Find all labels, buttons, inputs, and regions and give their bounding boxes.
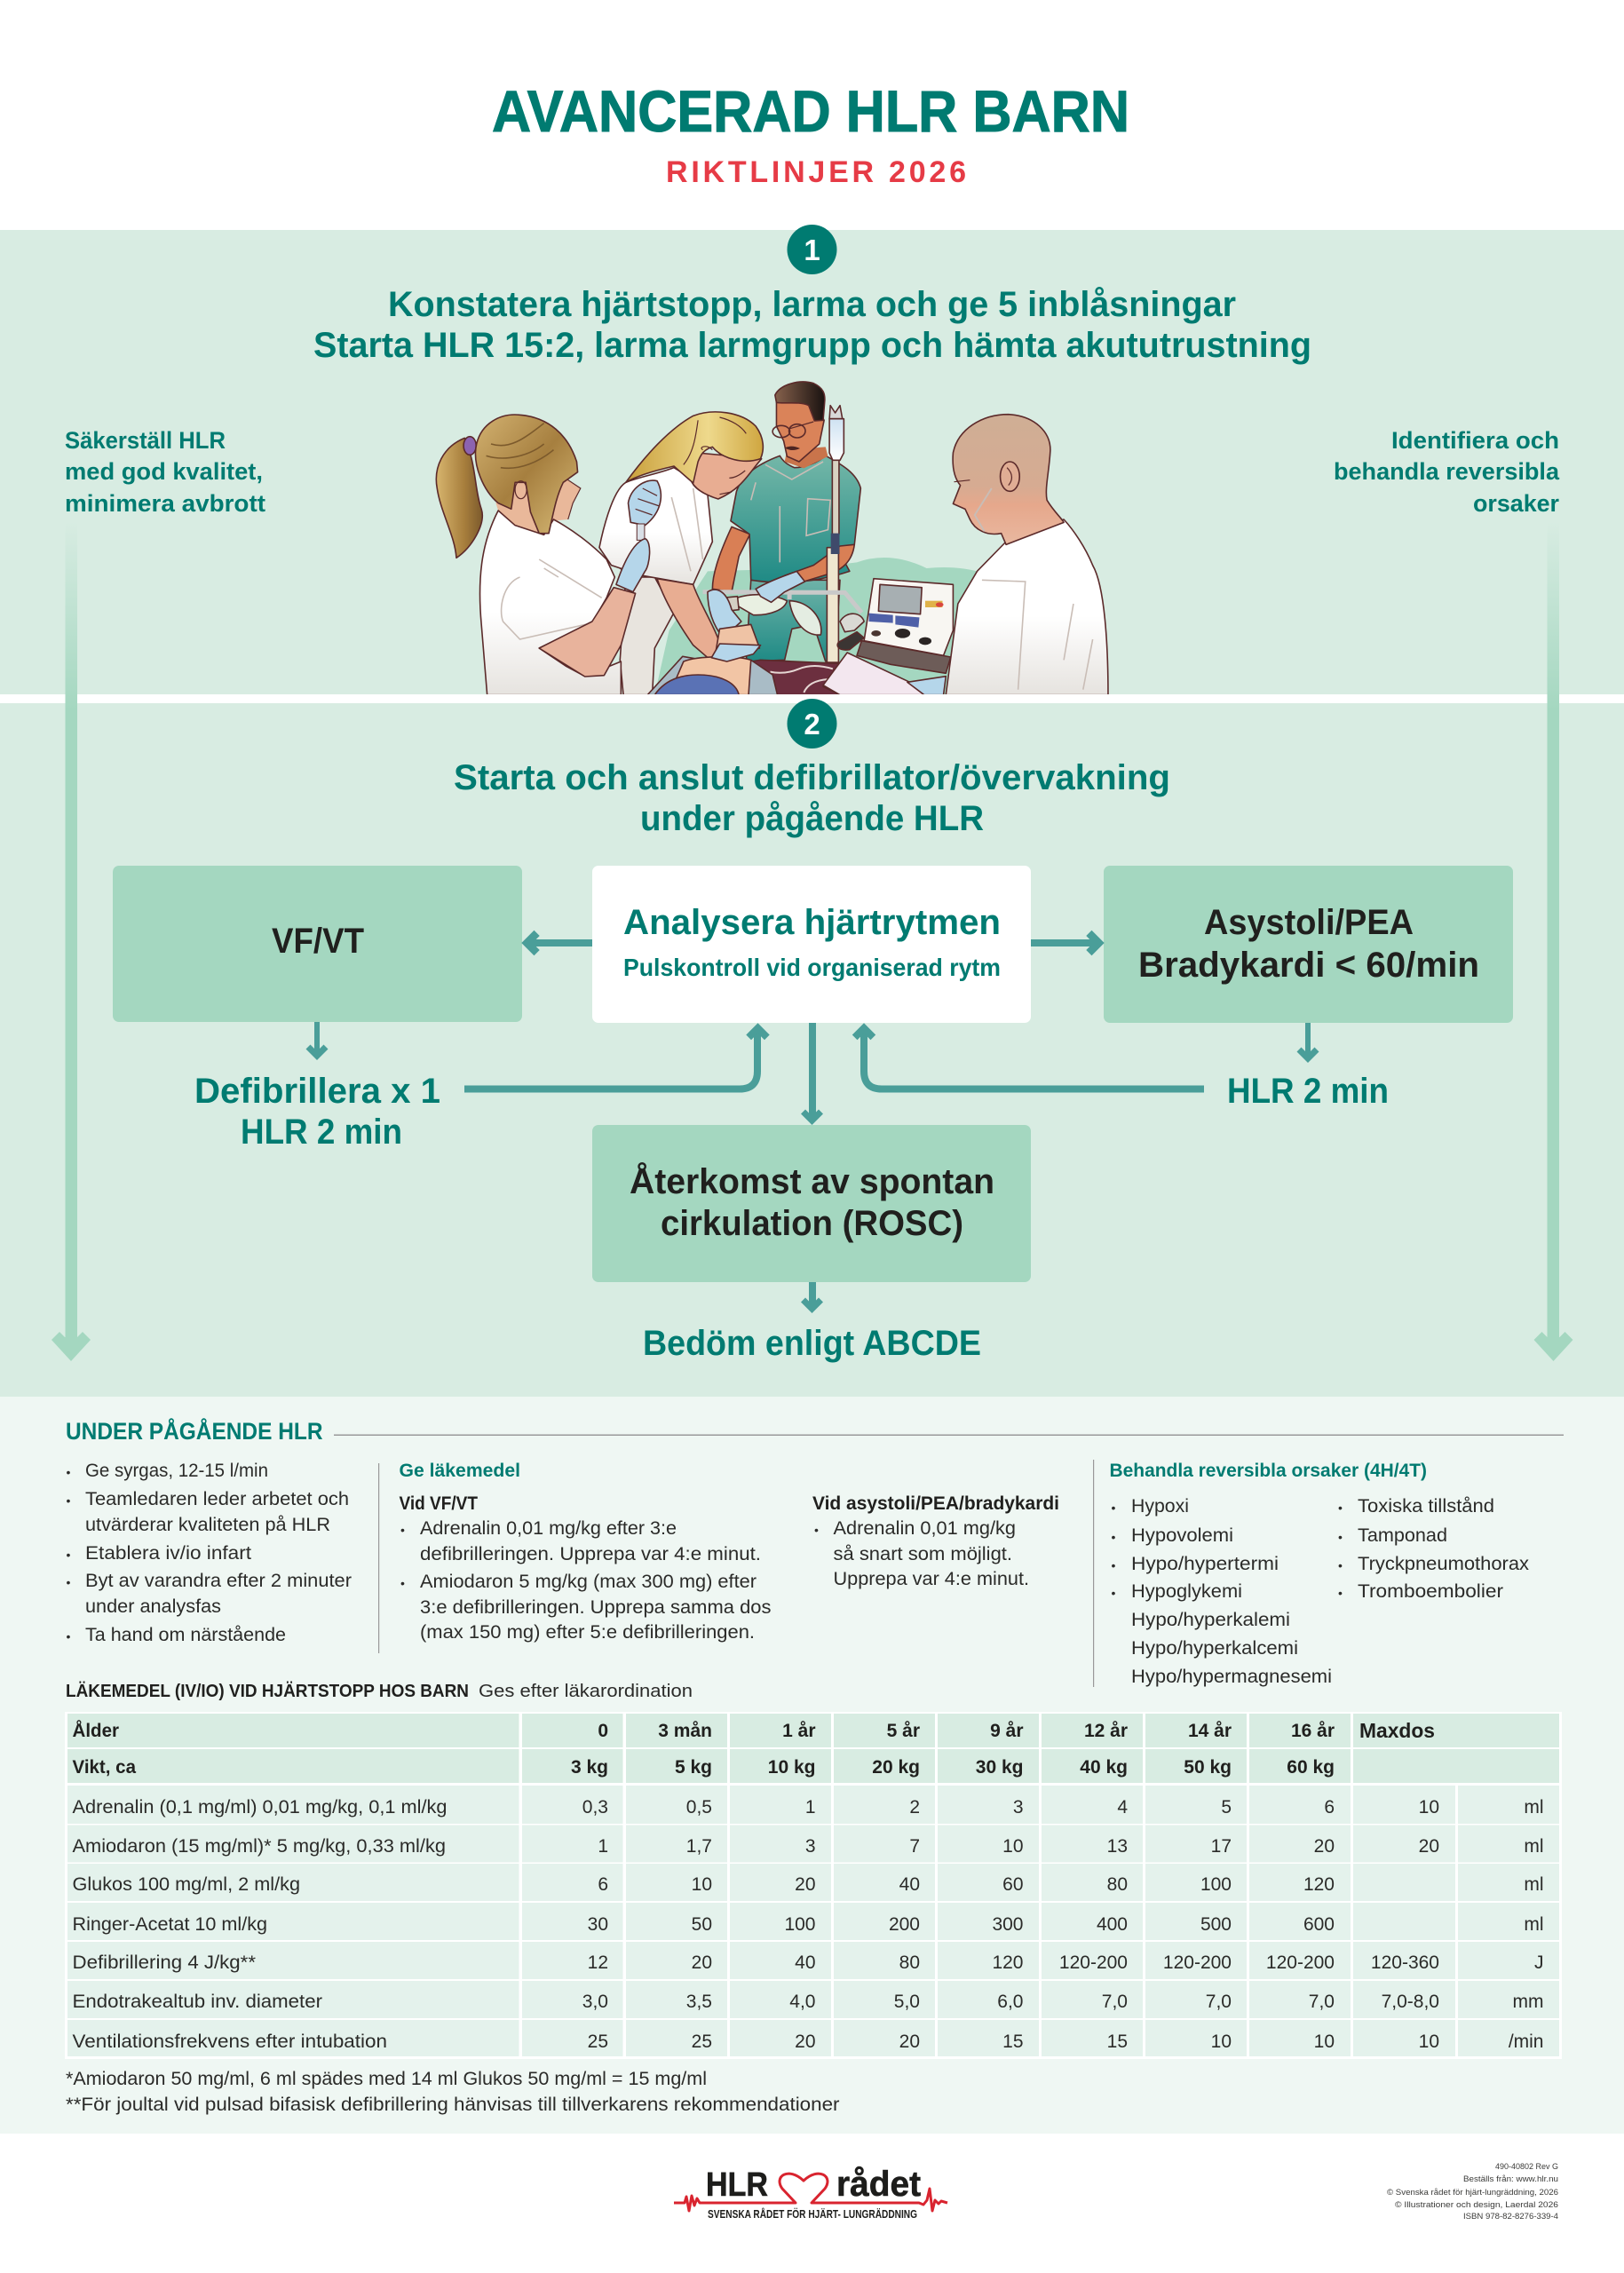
table row: ringer acetate: 100 xyxy=(784,1914,815,1935)
table row: adrenaline: 5 xyxy=(1221,1797,1232,1818)
text: ensure quality CPR: Säkerställ HLR xyxy=(65,427,226,454)
block: reversible causes: Hypo/hyperkalemi xyxy=(1131,1610,1290,1630)
imprint: Beställs från: www.hlr.nu xyxy=(1463,2174,1558,2184)
table row: glucose: 10 xyxy=(692,1874,712,1895)
box: analyse rhythm: Analysera hjärtrytmen xyxy=(623,903,1001,942)
table row: adrenaline: 10 xyxy=(1419,1797,1439,1818)
block: reversible causes xyxy=(1110,1461,1530,1687)
step 2 badge: 2 xyxy=(804,708,820,741)
block: reversible causes: Tamponad xyxy=(1358,1525,1447,1546)
text: identify reversible causes: orsaker xyxy=(1473,490,1559,517)
table row: endotracheal tube: 7,0 xyxy=(1309,1992,1335,2012)
block: reversible causes: Hypoglykemi xyxy=(1131,1581,1242,1602)
table row: weight: 5 kg xyxy=(675,1757,712,1778)
block: reversible causes: • xyxy=(1112,1530,1115,1544)
step 1 heading xyxy=(313,285,1311,365)
arrow: to ROSC xyxy=(801,1023,823,1125)
block: medication asystole: Adrenalin 0,01 mg/kg xyxy=(833,1518,1016,1539)
subtitle: RIKTLINJER 2026 xyxy=(666,155,966,189)
table row: endotracheal tube: 7,0 xyxy=(1206,1992,1232,2012)
table row: glucose: 100 xyxy=(1200,1874,1232,1895)
block: reversible causes: • xyxy=(1338,1586,1343,1600)
block: medication asystole: så snart som möjligt. xyxy=(833,1544,1012,1564)
imprint: 490-40802 Rev G xyxy=(1495,2162,1558,2172)
table row: adrenaline: 1 xyxy=(805,1797,815,1818)
table row: amiodarone: 20 xyxy=(1314,1836,1335,1857)
table row: age: Ålder xyxy=(73,1720,119,1741)
table row: endotracheal tube: 5,0 xyxy=(894,1992,920,2012)
bed rail and ventilation bag xyxy=(703,571,861,635)
white separator band xyxy=(0,694,1624,703)
table row: ringer acetate: Ringer-Acetat 10 ml/kg xyxy=(73,1914,267,1935)
table row: ringer acetate: 50 xyxy=(692,1914,712,1935)
table row: ventilation rate: 20 xyxy=(795,2031,815,2052)
table row: weight: 40 kg xyxy=(1080,1757,1128,1778)
table row: weight: 30 kg xyxy=(976,1757,1023,1778)
table row: endotracheal tube: 6,0 xyxy=(997,1992,1023,2012)
text: defibrillate: Defibrillera x 1 xyxy=(194,1072,440,1111)
table row: age: 0 xyxy=(598,1721,608,1741)
table row: defibrillation: 20 xyxy=(692,1952,712,1973)
table row: weight xyxy=(73,1757,1335,1778)
text: defibrillate xyxy=(194,1072,440,1152)
table row: defibrillation xyxy=(73,1952,1543,1973)
table row: defibrillation: Defibrillering 4 J/kg** xyxy=(73,1952,256,1973)
table row: ventilation rate: 25 xyxy=(588,2031,608,2052)
table row: glucose: 80 xyxy=(1107,1874,1128,1895)
list: general actions: under analysfas xyxy=(85,1596,221,1617)
arrow: to asystole xyxy=(1031,931,1104,955)
step 2 badge xyxy=(787,699,836,748)
list: general actions: Etablera iv/io infart xyxy=(85,1543,251,1564)
block: medication asystole xyxy=(812,1493,1059,1589)
table row: endotracheal tube: 4,0 xyxy=(789,1992,815,2012)
table row: ventilation rate: 10 xyxy=(1211,2031,1232,2052)
table row: weight: 20 kg xyxy=(872,1757,920,1778)
table row: age: 5 år xyxy=(887,1721,920,1741)
block: give medication VF/VT: Vid VF/VT xyxy=(400,1493,478,1514)
table row: adrenaline: 2 xyxy=(909,1797,920,1818)
table row: age: 9 år xyxy=(990,1721,1023,1741)
block: reversible causes: Hypo/hyperkalcemi xyxy=(1131,1638,1298,1659)
arrow: defibrillate return xyxy=(464,1024,769,1089)
table heading: Ges efter läkarordination xyxy=(479,1682,693,1701)
table row: amiodarone: 10 xyxy=(1002,1836,1023,1857)
table row: weight: 60 kg xyxy=(1287,1757,1335,1778)
table row: age: 16 år xyxy=(1291,1721,1335,1741)
arrow: asystole down xyxy=(1296,1023,1319,1063)
table row: weight: 50 kg xyxy=(1184,1757,1232,1778)
iv stand xyxy=(827,406,844,662)
table row: defibrillation: 120-200 xyxy=(1059,1952,1128,1973)
table row: ringer acetate: ml xyxy=(1524,1914,1543,1935)
footnotes: *Amiodaron 50 mg/ml, 6 ml spädes med 14 ml Glukos 50 mg/ml = 15 mg/ml xyxy=(66,2069,707,2089)
doctor in green scrubs xyxy=(712,382,860,661)
table row: age: 14 år xyxy=(1188,1721,1232,1741)
block: reversible causes: Hypo/hypertermi xyxy=(1131,1554,1279,1574)
block: reversible causes: Hypovolemi xyxy=(1131,1525,1233,1546)
table row: amiodarone: 13 xyxy=(1107,1836,1128,1857)
text: ensure quality CPR: med god kvalitet, xyxy=(65,458,263,485)
table row: glucose xyxy=(73,1874,1543,1895)
block: give medication VF/VT: (max 150 mg) efter 5:e defibrilleringen. xyxy=(420,1622,755,1643)
nurse with blond hair xyxy=(599,412,763,695)
list: general actions: • xyxy=(66,1575,71,1589)
step 2 heading: under pågående HLR xyxy=(640,799,984,838)
table row: glucose: 60 xyxy=(1002,1874,1023,1895)
list: general actions: • xyxy=(66,1548,71,1562)
table row: defibrillation: 40 xyxy=(795,1952,815,1973)
list: general actions: • xyxy=(66,1629,71,1643)
arrow: CPR return xyxy=(852,1024,1204,1089)
table row: endotracheal tube: mm xyxy=(1513,1992,1543,2012)
table row: endotracheal tube: 3,5 xyxy=(686,1992,712,2012)
table row: weight: 10 kg xyxy=(768,1757,815,1778)
table row: weight: 3 kg xyxy=(571,1757,608,1778)
table row: adrenaline: 6 xyxy=(1324,1797,1335,1818)
table row: ventilation rate: 15 xyxy=(1002,2031,1023,2052)
block: medication asystole: • xyxy=(814,1523,819,1537)
block: reversible causes: • xyxy=(1338,1530,1343,1544)
table row: endotracheal tube: 3,0 xyxy=(582,1992,608,2012)
table row: amiodarone: Amiodaron (15 mg/ml)* 5 mg/kg, 0,33 ml/kg xyxy=(73,1836,446,1857)
table row: defibrillation: 120-200 xyxy=(1163,1952,1232,1973)
table row: ringer acetate: 200 xyxy=(889,1914,920,1935)
text: ensure quality CPR xyxy=(65,427,265,517)
table row: defibrillation: J xyxy=(1534,1952,1543,1973)
box: asystole/PEA: Asystoli/PEA xyxy=(1204,903,1414,942)
background blob xyxy=(654,558,996,695)
bald man xyxy=(946,415,1108,695)
block: give medication VF/VT: Ge läkemedel xyxy=(400,1461,520,1481)
box: ROSC xyxy=(592,1125,1031,1282)
block: give medication VF/VT: 3:e defibrilleringen. Upprepa samma dos xyxy=(420,1597,771,1618)
list: general actions: utvärderar kvaliteten på HLR xyxy=(85,1515,330,1535)
table row: amiodarone xyxy=(73,1836,1543,1857)
block: reversible causes: • xyxy=(1338,1501,1343,1515)
list: general actions: Ta hand om närstående xyxy=(85,1625,286,1645)
table row: age: Maxdos xyxy=(1359,1719,1435,1742)
step 1 badge xyxy=(787,225,836,274)
table row: ventilation rate: 10 xyxy=(1419,2031,1439,2052)
block: give medication VF/VT: Adrenalin 0,01 mg/kg efter 3:e xyxy=(420,1518,677,1539)
table row: ventilation rate: 15 xyxy=(1107,2031,1128,2052)
block: reversible causes: Behandla reversibla orsaker (4H/4T) xyxy=(1110,1461,1427,1481)
table heading: LÄKEMEDEL (IV/IO) VID HJÄRTSTOPP HOS BARN xyxy=(66,1681,469,1701)
block: give medication VF/VT xyxy=(400,1461,771,1643)
step 1 heading: Konstatera hjärtstopp, larma och ge 5 inblåsningar xyxy=(388,285,1236,324)
block: reversible causes: Toxiska tillstånd xyxy=(1358,1496,1494,1517)
text: identify reversible causes xyxy=(1334,427,1560,517)
panel: during CPR background xyxy=(0,1397,1624,2134)
defibrillator xyxy=(837,579,953,673)
text: ensure quality CPR: minimera avbrott xyxy=(65,490,265,517)
list: general actions: Teamledaren leder arbetet och xyxy=(85,1489,349,1509)
box: asystole/PEA: Bradykardi < 60/min xyxy=(1138,946,1479,985)
table row: adrenaline: 0,5 xyxy=(686,1797,712,1818)
block: medication asystole: Vid asystoli/PEA/bradykardi xyxy=(812,1493,1059,1514)
table row: defibrillation: 120-200 xyxy=(1266,1952,1335,1973)
block: reversible causes: • xyxy=(1112,1501,1115,1515)
imprint: ISBN 978-82-8276-339-4 xyxy=(1463,2212,1558,2222)
block: reversible causes: Hypoxi xyxy=(1131,1496,1189,1517)
logo: HLR-rådet: HLR xyxy=(706,2166,768,2204)
text: defibrillate: HLR 2 min xyxy=(241,1113,402,1152)
list: general actions: Ge syrgas, 12-15 l/min xyxy=(85,1461,268,1481)
arrow: VF/VT down xyxy=(305,1022,329,1060)
list: general actions: • xyxy=(66,1493,71,1508)
table row: amiodarone: 1,7 xyxy=(686,1836,712,1857)
table row: defibrillation: 120-360 xyxy=(1371,1952,1439,1973)
table row: adrenaline: 0,3 xyxy=(582,1797,608,1818)
step 1 heading: Starta HLR 15:2, larma larmgrupp och hämta akututrustning xyxy=(313,326,1311,365)
illustration: resuscitation team xyxy=(436,382,1108,695)
paper and hand xyxy=(823,653,946,695)
footnotes: **För joultal vid pulsad bifasisk defibrillering hänvisas till tillverkarens rekommendationer xyxy=(66,2095,840,2115)
text: identify reversible causes: behandla reversibla xyxy=(1334,458,1560,485)
table row: ventilation rate: 20 xyxy=(899,2031,920,2052)
table row: adrenaline: Adrenalin (0,1 mg/ml) 0,01 mg/kg, 0,1 ml/kg xyxy=(73,1797,448,1818)
table row: weight: Vikt, ca xyxy=(73,1757,136,1778)
block: reversible causes: Tromboembolier xyxy=(1358,1581,1503,1602)
table row: glucose: 20 xyxy=(795,1874,815,1895)
table row: glucose: 6 xyxy=(598,1874,608,1895)
table row: defibrillation: 80 xyxy=(899,1952,920,1973)
table heading xyxy=(66,1681,693,1701)
table row: age: 12 år xyxy=(1084,1721,1128,1741)
arrow: to VF/VT xyxy=(522,931,592,955)
heading: during CPR: UNDER PÅGÅENDE HLR xyxy=(66,1417,323,1445)
box: VF/VT: VF/VT xyxy=(272,922,364,961)
box: ROSC: Återkomst av spontan xyxy=(630,1161,994,1201)
step 2 heading xyxy=(454,758,1170,838)
table row: ringer acetate: 600 xyxy=(1303,1914,1335,1935)
patient xyxy=(647,624,840,695)
step 1 badge: 1 xyxy=(804,234,820,266)
table row: amiodarone: 1 xyxy=(598,1836,608,1857)
table row: ventilation rate xyxy=(73,2031,1543,2052)
table row: defibrillation: 12 xyxy=(588,1952,608,1973)
list: general actions: Byt av varandra efter 2 minuter xyxy=(85,1571,352,1591)
block: reversible causes: • xyxy=(1338,1558,1343,1572)
table row: amiodarone: 7 xyxy=(909,1836,920,1857)
logo: HLR-rådet: SVENSKA RÅDET FÖR HJÄRT- LUNGRÄDDNING xyxy=(708,2207,917,2221)
table row: glucose: 40 xyxy=(899,1874,920,1895)
box: analyse rhythm xyxy=(592,866,1031,1023)
panel: step 1 background xyxy=(0,230,1624,694)
box: ROSC: cirkulation (ROSC) xyxy=(661,1204,963,1243)
table row: ventilation rate: Ventilationsfrekvens efter intubation xyxy=(73,2031,387,2052)
block: give medication VF/VT: • xyxy=(400,1523,405,1537)
title: AVANCERAD HLR BARN xyxy=(492,78,1129,144)
text: identify reversible causes: Identifiera och xyxy=(1391,427,1559,454)
box: VF/VT xyxy=(113,866,522,1022)
table row: ventilation rate: 25 xyxy=(692,2031,712,2052)
imprint: © Illustrationer och design, Laerdal 2026 xyxy=(1395,2200,1558,2210)
list: general actions xyxy=(66,1461,352,1645)
imprint xyxy=(1387,2162,1558,2222)
step 2 heading: Starta och anslut defibrillator/övervakning xyxy=(454,758,1170,797)
table row: glucose: ml xyxy=(1524,1874,1543,1895)
block: reversible causes: • xyxy=(1112,1558,1115,1572)
box: analyse rhythm: Pulskontroll vid organiserad rytm xyxy=(623,954,1001,981)
table row: ringer acetate: 500 xyxy=(1200,1914,1232,1935)
table row: age xyxy=(73,1719,1435,1742)
logo: HLR-rådet xyxy=(674,2165,947,2221)
block: reversible causes: Tryckpneumothorax xyxy=(1358,1554,1530,1574)
table row: ringer acetate: 30 xyxy=(588,1914,608,1935)
table row: age: 1 år xyxy=(782,1721,815,1741)
text: CPR 2 min: HLR 2 min xyxy=(1227,1072,1389,1111)
table row: amiodarone: ml xyxy=(1524,1836,1543,1857)
arrow: ROSC down xyxy=(801,1282,823,1313)
block: give medication VF/VT: • xyxy=(400,1576,405,1590)
table row: ventilation rate: 10 xyxy=(1314,2031,1335,2052)
table row: amiodarone: 17 xyxy=(1211,1836,1232,1857)
table row: amiodarone: 3 xyxy=(805,1836,815,1857)
table row: adrenaline: ml xyxy=(1524,1797,1543,1818)
panel: step 2 background xyxy=(0,703,1624,1397)
table row: ringer acetate: 300 xyxy=(992,1914,1023,1935)
table row: glucose: Glukos 100 mg/ml, 2 ml/kg xyxy=(73,1874,300,1895)
block: reversible causes: • xyxy=(1112,1586,1115,1600)
table row: adrenaline xyxy=(73,1797,1543,1818)
table row: endotracheal tube: 7,0-8,0 xyxy=(1382,1992,1439,2012)
table row: endotracheal tube: Endotrakealtub inv. diameter xyxy=(73,1992,322,2012)
footnotes xyxy=(66,2069,840,2115)
block: medication asystole: Upprepa var 4:e minut. xyxy=(833,1569,1029,1589)
table row: ventilation rate: /min xyxy=(1509,2031,1543,2052)
table row: adrenaline: 3 xyxy=(1013,1797,1023,1818)
block: reversible causes: Hypo/hypermagnesemi xyxy=(1131,1667,1332,1687)
table: drug doses xyxy=(65,1712,1562,2059)
table row: endotracheal tube: 7,0 xyxy=(1102,1992,1128,2012)
arrow: left continuous process xyxy=(51,521,91,1361)
arrow: right continuous process xyxy=(1534,521,1573,1361)
table row: defibrillation: 120 xyxy=(992,1952,1023,1973)
imprint: © Svenska rådet för hjärt-lungräddning, 2026 xyxy=(1387,2188,1558,2198)
table row: amiodarone: 20 xyxy=(1419,1836,1439,1857)
block: give medication VF/VT: Amiodaron 5 mg/kg (max 300 mg) efter xyxy=(420,1572,757,1592)
text: assess ABCDE: Bedöm enligt ABCDE xyxy=(643,1324,981,1363)
table row: endotracheal tube xyxy=(73,1992,1543,2012)
table row: ringer acetate xyxy=(73,1914,1543,1935)
table row: ringer acetate: 400 xyxy=(1097,1914,1128,1935)
list: general actions: • xyxy=(66,1465,71,1479)
table row: age: 3 mån xyxy=(658,1721,712,1741)
box: asystole/PEA xyxy=(1104,866,1513,1023)
table row: glucose: 120 xyxy=(1303,1874,1335,1895)
logo: HLR-rådet: rådet xyxy=(836,2165,921,2204)
block: give medication VF/VT: defibrilleringen. Upprepa var 4:e minut. xyxy=(420,1544,761,1564)
table row: adrenaline: 4 xyxy=(1117,1797,1128,1818)
nurse with ponytail xyxy=(436,415,650,695)
